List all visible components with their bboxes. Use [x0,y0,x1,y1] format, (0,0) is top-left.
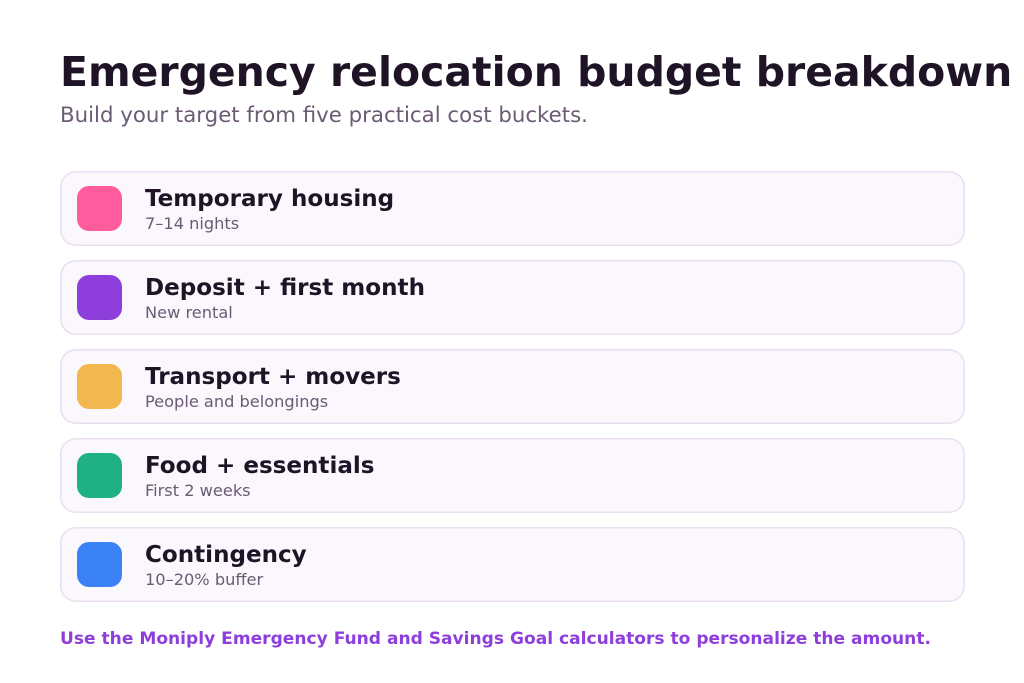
heading: contingency: Contingency [145,542,307,568]
heading: transport: Transport + movers [145,364,401,390]
subtitle: Build your target from five practical cost buckets. [60,103,588,128]
text: 7-14 nights: 7–14 nights [145,214,239,232]
icon: blue square [77,542,122,587]
footer note: Use the Moniply Emergency Fund and Savings Goal calculators to personalize the amount. [60,628,931,648]
panel: deposit [60,260,965,335]
text: first 2 weeks: First 2 weeks [145,480,251,500]
title: Emergency relocation budget breakdown [60,48,1012,96]
text: new rental: New rental [145,302,233,322]
icon: green square [77,453,122,498]
text: buffer: 10–20% buffer [145,570,263,588]
icon: purple square [77,275,122,320]
icon: pink square [77,186,122,231]
heading: food: Food + essentials [145,452,375,478]
panel: contingency [60,527,965,602]
icon: amber square [77,364,122,409]
heading: temporary housing: Temporary housing [145,186,394,212]
panel: food [60,438,965,513]
panel: temporary housing [60,171,965,246]
heading: deposit: Deposit + first month [145,274,425,300]
panel: transport [60,349,965,424]
text: people and belongings: People and belongings [145,392,328,410]
